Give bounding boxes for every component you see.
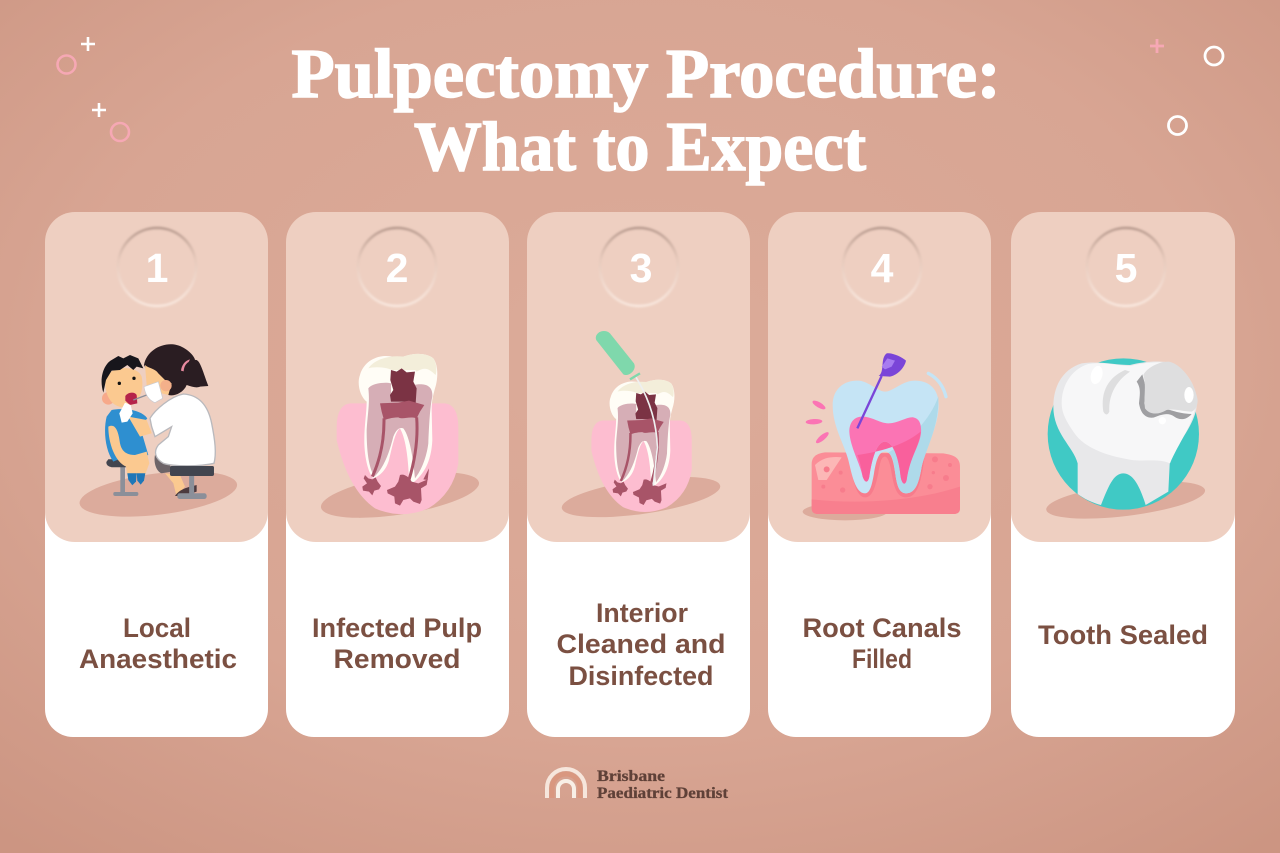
label: interior cleaned and disinfected xyxy=(556,598,726,691)
illustration: dentist examining child xyxy=(77,344,240,524)
label: interior cleaned and disinfected: Cleaned and xyxy=(556,629,726,659)
step number 2: 2 xyxy=(386,245,408,291)
icon: rainbow xyxy=(547,769,585,798)
logo: Brisbane Paediatric Dentist: Brisbane xyxy=(597,768,665,785)
label: tooth sealed: Tooth Sealed xyxy=(1038,620,1208,650)
label: local anaesthetic: Anaesthetic xyxy=(79,644,237,674)
panel: step 2 infected pulp removed xyxy=(286,212,509,737)
decoration: top right sparkles xyxy=(1150,39,1223,134)
label: root canals filled: Root Canals xyxy=(802,613,962,643)
step number 5 xyxy=(1087,228,1165,306)
label: infected pulp removed xyxy=(312,613,482,674)
panel: step 5 tooth sealed xyxy=(1011,212,1235,737)
step number 2 xyxy=(358,228,436,306)
step number 3 xyxy=(600,228,678,306)
logo: Brisbane Paediatric Dentist xyxy=(547,768,729,802)
label: root canals filled: Filled xyxy=(852,644,912,674)
label: root canals filled xyxy=(802,613,962,674)
step number 5: 5 xyxy=(1115,245,1137,291)
illustration: root canal file in tooth xyxy=(559,331,723,525)
panel: step 3 interior cleaned and disinfected xyxy=(527,212,750,737)
illustration: sealed tooth xyxy=(1044,358,1207,526)
title: Pulpectomy Procedure: xyxy=(292,36,1000,113)
label: interior cleaned and disinfected: Disinfected xyxy=(568,661,714,691)
step number 1: 1 xyxy=(146,245,168,291)
illustration: filled tooth in gum xyxy=(803,353,960,520)
label: interior cleaned and disinfected: Interior xyxy=(596,598,688,628)
step number 1 xyxy=(118,228,196,306)
label: infected pulp removed: Removed xyxy=(334,644,460,674)
label: local anaesthetic: Local xyxy=(123,613,191,643)
illustration: infected tooth xyxy=(318,354,482,527)
title: What to Expect xyxy=(414,109,866,186)
label: local anaesthetic xyxy=(79,613,237,674)
title xyxy=(292,36,1000,186)
step number 4: 4 xyxy=(871,245,894,291)
logo: Brisbane Paediatric Dentist: Paediatric Dentist xyxy=(597,785,729,802)
step number 4 xyxy=(843,228,921,306)
panel: step 1 local anaesthetic xyxy=(45,212,268,737)
decoration: top left sparkles xyxy=(58,37,129,141)
panel: step 4 root canals filled xyxy=(768,212,991,737)
label: infected pulp removed: Infected Pulp xyxy=(312,613,482,643)
step number 3: 3 xyxy=(630,245,652,291)
